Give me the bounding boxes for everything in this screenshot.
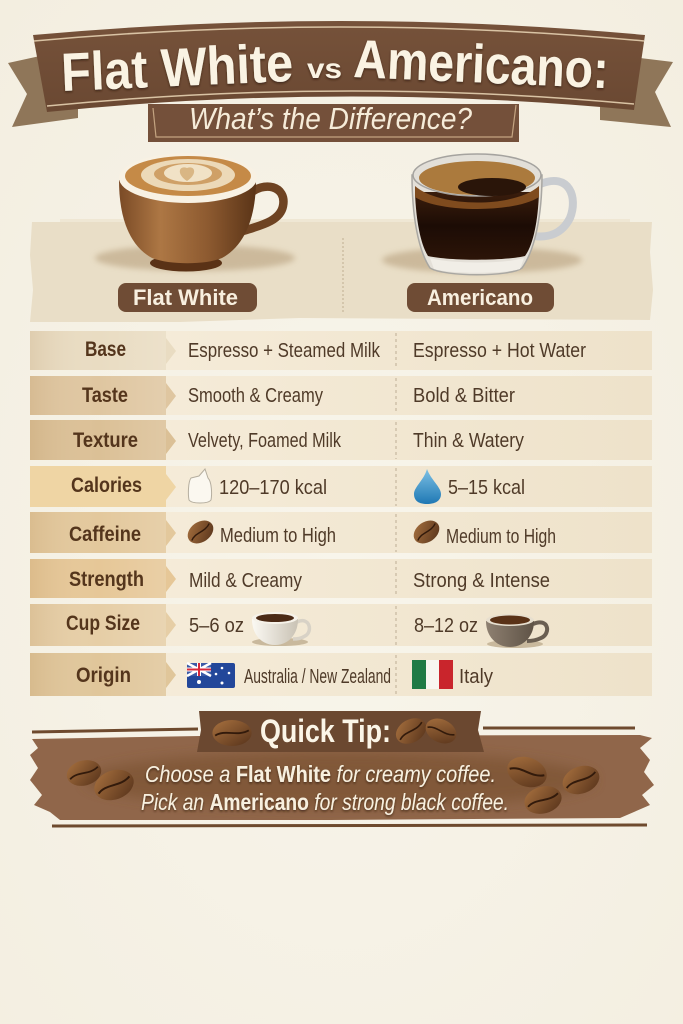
tip text	[141, 761, 509, 815]
row: calories	[30, 466, 652, 507]
icon: small white cup	[252, 612, 309, 646]
row: origin: Italy	[459, 666, 493, 688]
coffee surface	[419, 161, 535, 195]
beans right of heading	[391, 713, 460, 749]
ribbon main	[33, 21, 645, 112]
row: texture: Texture	[73, 429, 138, 452]
row: caffeine: Caffeine	[69, 523, 141, 546]
ribbon tail left	[8, 56, 78, 127]
americano glass	[412, 154, 573, 275]
row: caffeine: Medium to High	[220, 525, 336, 547]
row: texture: Velvety, Foamed Milk	[188, 430, 342, 452]
ribbon tail right	[600, 58, 673, 127]
quick tip panel	[30, 711, 654, 826]
row: texture: Thin & Watery	[413, 430, 524, 452]
band highlight	[85, 752, 595, 808]
coffee	[415, 192, 539, 260]
row: taste: Taste	[82, 384, 128, 407]
beans right	[503, 751, 603, 818]
icon: coffee bean	[409, 516, 444, 548]
row: cup size: Cup Size	[66, 612, 140, 635]
handle	[240, 187, 283, 232]
row: strength: Mild & Creamy	[189, 570, 302, 592]
subtitle: What’s the Difference?	[189, 101, 473, 136]
subtitle plaque	[148, 101, 519, 142]
handle	[534, 181, 573, 236]
bean left of heading	[212, 720, 252, 746]
coffee surface	[125, 156, 251, 196]
rim	[119, 153, 257, 203]
comparison table	[30, 331, 652, 696]
row: strength	[30, 559, 652, 598]
foot	[150, 254, 222, 272]
row: base: Espresso + Steamed Milk	[188, 340, 381, 362]
base highlights	[430, 258, 524, 273]
row: strength: Strength	[69, 568, 144, 591]
row: texture	[30, 420, 652, 460]
row: origin: Australia / New Zealand	[244, 666, 391, 688]
bottom rule	[52, 825, 647, 826]
row: base	[30, 331, 652, 370]
title text: Americano:	[352, 29, 610, 100]
latte art	[141, 159, 235, 191]
row: taste: Bold & Bitter	[413, 385, 515, 407]
row: caffeine: Medium to High	[446, 526, 556, 548]
shadow under cups	[95, 245, 295, 271]
row: calories: 120–170 kcal	[219, 477, 327, 499]
title text: Flat White	[60, 33, 294, 103]
top rule	[32, 728, 635, 732]
label: flat white: Flat White	[133, 285, 238, 310]
row: strength: Strong & Intense	[413, 570, 550, 592]
crema	[415, 186, 539, 209]
row: cup size: 5–6 oz	[189, 615, 244, 637]
title banner	[8, 21, 673, 142]
label: flat white	[118, 283, 257, 312]
row: calories: Calories	[71, 474, 142, 497]
icon: water drop	[414, 469, 441, 504]
hero panel	[30, 219, 653, 322]
icon: large grey cup	[486, 614, 547, 648]
beans left	[64, 756, 138, 806]
row: base: Espresso + Hot Water	[413, 340, 586, 362]
title text: vs	[307, 53, 342, 84]
icon: coffee bean	[183, 516, 218, 548]
row: taste: Smooth & Creamy	[188, 385, 323, 407]
rim	[413, 154, 541, 196]
label: americano: Americano	[427, 285, 533, 310]
row: cup size	[30, 604, 652, 648]
icon: italy flag	[412, 660, 453, 689]
row: caffeine	[30, 512, 652, 553]
icon: australia flag	[187, 663, 235, 688]
row: taste	[30, 376, 652, 415]
title text	[60, 29, 610, 103]
quick tip plaque	[197, 711, 484, 752]
icon: milk glass	[188, 469, 212, 503]
brush band	[30, 735, 654, 820]
tip text: Choose a Flat White for creamy coffee.	[145, 761, 496, 787]
row: origin	[30, 653, 652, 696]
row: calories: 5–15 kcal	[448, 477, 525, 499]
glass body	[412, 175, 542, 275]
row: origin: Origin	[76, 664, 131, 687]
row: base: Base	[85, 338, 126, 361]
row: cup size: 8–12 oz	[414, 615, 478, 637]
flat white cup	[119, 153, 283, 272]
label: americano	[407, 283, 554, 312]
quick tip heading: Quick Tip:	[260, 713, 391, 749]
body	[119, 180, 256, 263]
tip text: Pick an Americano for strong black coffee.	[141, 789, 509, 815]
